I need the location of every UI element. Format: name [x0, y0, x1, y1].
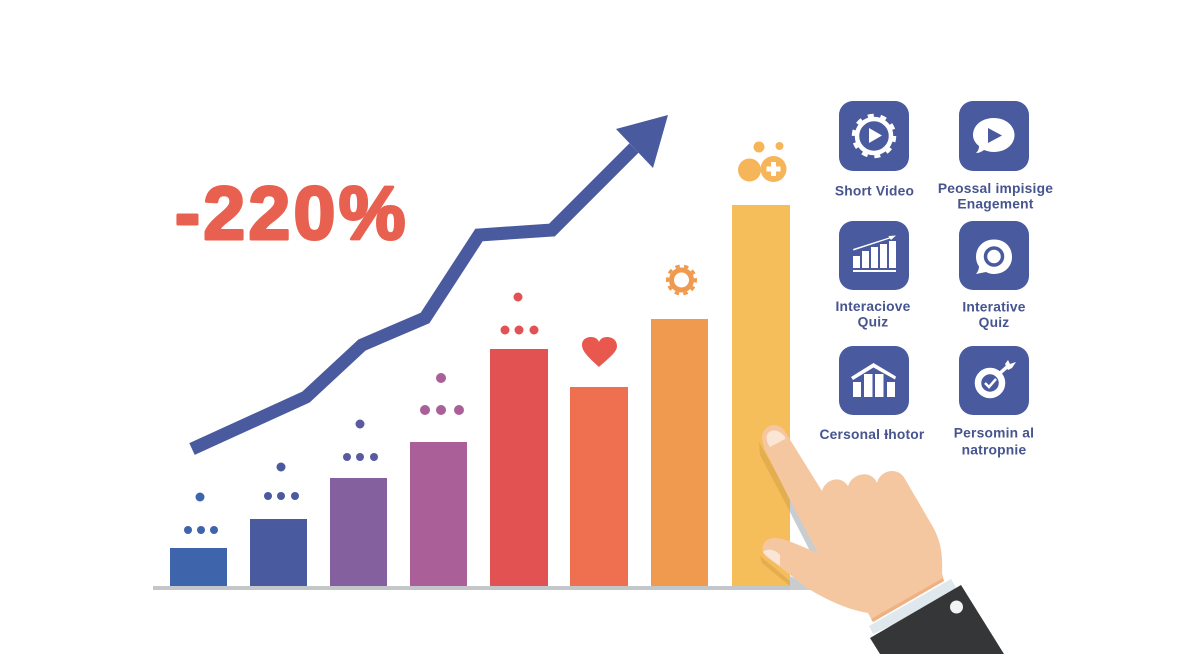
jacket sleeve — [870, 585, 1004, 654]
label: interactive quiz: Interaciove — [835, 299, 911, 314]
icon tile: house chart — [839, 346, 909, 415]
label: persomin al natropnie — [954, 426, 1034, 458]
label: interactive quiz: Quiz — [858, 314, 888, 330]
label: persomin al natropnie: natropnie — [962, 442, 1026, 458]
icon tile: ring bubble — [959, 221, 1029, 290]
pointing hand with sleeve — [759, 425, 1004, 654]
icon tile: target check — [959, 346, 1029, 415]
axis baseline — [153, 586, 810, 590]
label: personal engagement — [938, 181, 1053, 212]
dots above bars 1 to 5 — [184, 292, 538, 534]
wrist crease — [871, 578, 944, 622]
hand — [762, 425, 944, 622]
panel: icon grid — [820, 101, 1053, 458]
label: persomin al natropnie: Persomin al — [954, 426, 1034, 440]
index fingernail — [767, 431, 785, 447]
thumb nail — [763, 550, 780, 566]
label: personal engagement: Peossal impisige — [938, 181, 1053, 196]
icon tile: bar chart — [839, 221, 909, 290]
icon: heart — [582, 337, 617, 367]
finger shadow on bar — [759, 442, 790, 586]
rising trend arrow — [192, 115, 668, 449]
label: personal shotor: Cersonal Ɨhotor — [820, 427, 925, 442]
icon tile: speech bubble play — [959, 101, 1029, 171]
sleeve button — [950, 600, 963, 614]
headline percentage: -220% — [175, 171, 409, 255]
icon: yellow bubbles with plus — [738, 142, 786, 182]
label: short video: Short Video — [835, 184, 914, 198]
label: interative quiz: Interative — [962, 300, 1026, 314]
label: interative quiz: Quiz — [979, 315, 1009, 330]
label: interative quiz — [962, 300, 1026, 330]
bar chart — [170, 205, 790, 586]
label: personal engagement: Enagement — [957, 196, 1034, 212]
gray hand shadow — [790, 496, 820, 590]
label: interactive quiz — [835, 299, 911, 330]
shirt cuff — [869, 579, 960, 634]
icon: orange gear — [668, 266, 696, 294]
icon tile: short video — [839, 101, 909, 171]
